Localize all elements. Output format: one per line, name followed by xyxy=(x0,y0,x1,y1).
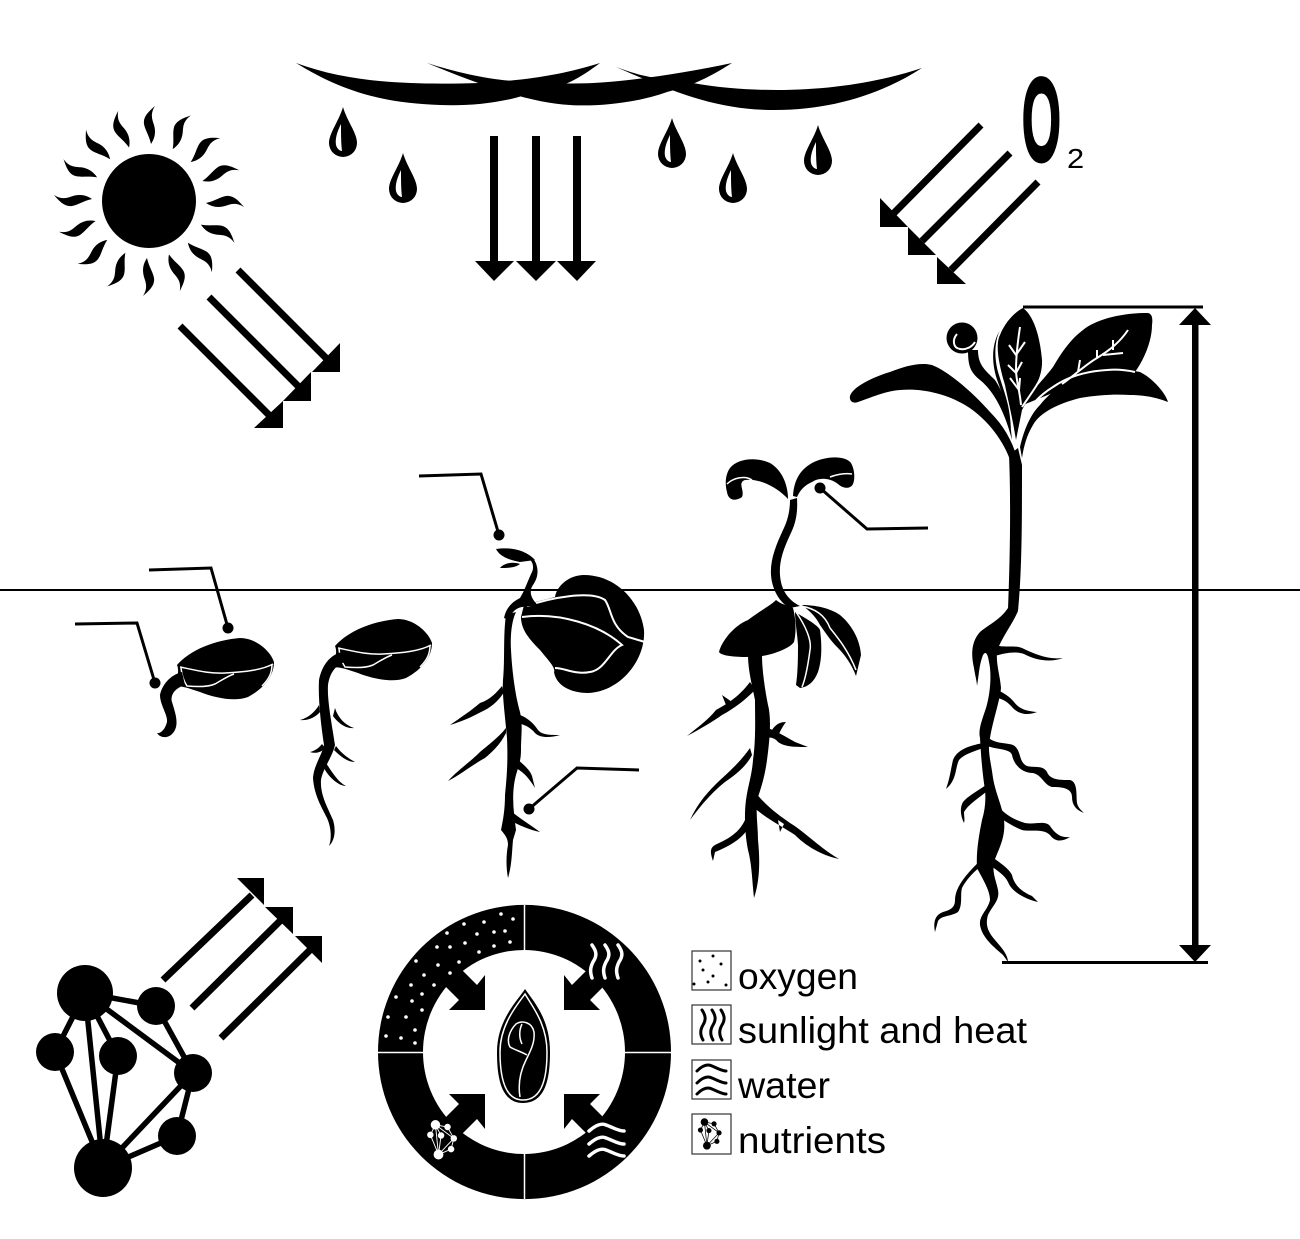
top right leaf xyxy=(1023,313,1152,405)
oxygen symbol: O xyxy=(1023,58,1060,181)
legend: water xyxy=(692,1060,830,1106)
water waves icon xyxy=(589,1124,624,1156)
root system xyxy=(934,608,1084,962)
germination conditions ring xyxy=(378,905,671,1199)
stage 3: sprouting seedling xyxy=(448,548,645,878)
legend: sunlight and heat: sunlight and heat xyxy=(738,1009,1028,1051)
ground line xyxy=(0,589,1300,591)
legend: nutrients xyxy=(692,1114,886,1161)
callout: root xyxy=(524,768,639,814)
stem xyxy=(1008,448,1022,611)
stage 5: young plant xyxy=(850,308,1168,962)
sun xyxy=(54,106,244,296)
stage 1: germinating seed xyxy=(157,638,274,737)
callout: plumule xyxy=(419,474,504,540)
callout: cotyledon xyxy=(814,482,928,529)
arrows: rain xyxy=(475,136,596,281)
oxygen symbol: 2 xyxy=(1067,143,1084,175)
oxygen symbol xyxy=(1023,58,1084,181)
height dimension arrow xyxy=(1002,306,1211,964)
legend: nutrients: nutrients xyxy=(738,1119,886,1161)
middle leaf xyxy=(993,308,1042,440)
central seed xyxy=(497,989,550,1103)
four inward arrows xyxy=(444,965,605,1139)
arrows: nutrients xyxy=(163,878,322,1038)
legend: oxygen xyxy=(692,951,858,997)
stage 2: seed with young root xyxy=(300,619,432,846)
legend: oxygen: oxygen xyxy=(738,955,858,997)
arrows: sunlight xyxy=(180,270,340,428)
legend: water: water xyxy=(737,1064,830,1106)
legend xyxy=(692,951,1028,1161)
curled fern shoot xyxy=(946,322,1012,440)
clouds xyxy=(296,63,922,110)
nutrients cluster xyxy=(36,965,212,1197)
nutrients mini icon xyxy=(427,1120,457,1159)
stage 4: seedling with cotyledons xyxy=(687,457,861,898)
heat waves icon xyxy=(591,945,622,978)
oxygen dots xyxy=(384,912,515,1045)
rain drops xyxy=(329,107,832,203)
right leaf xyxy=(1020,370,1168,458)
callout: seed coat xyxy=(149,568,234,634)
ring quarter dividers xyxy=(378,905,671,1199)
callout: radicle xyxy=(75,623,160,688)
arrows: oxygen xyxy=(880,125,1038,284)
black ring xyxy=(378,905,671,1199)
left leaf xyxy=(850,364,1017,460)
